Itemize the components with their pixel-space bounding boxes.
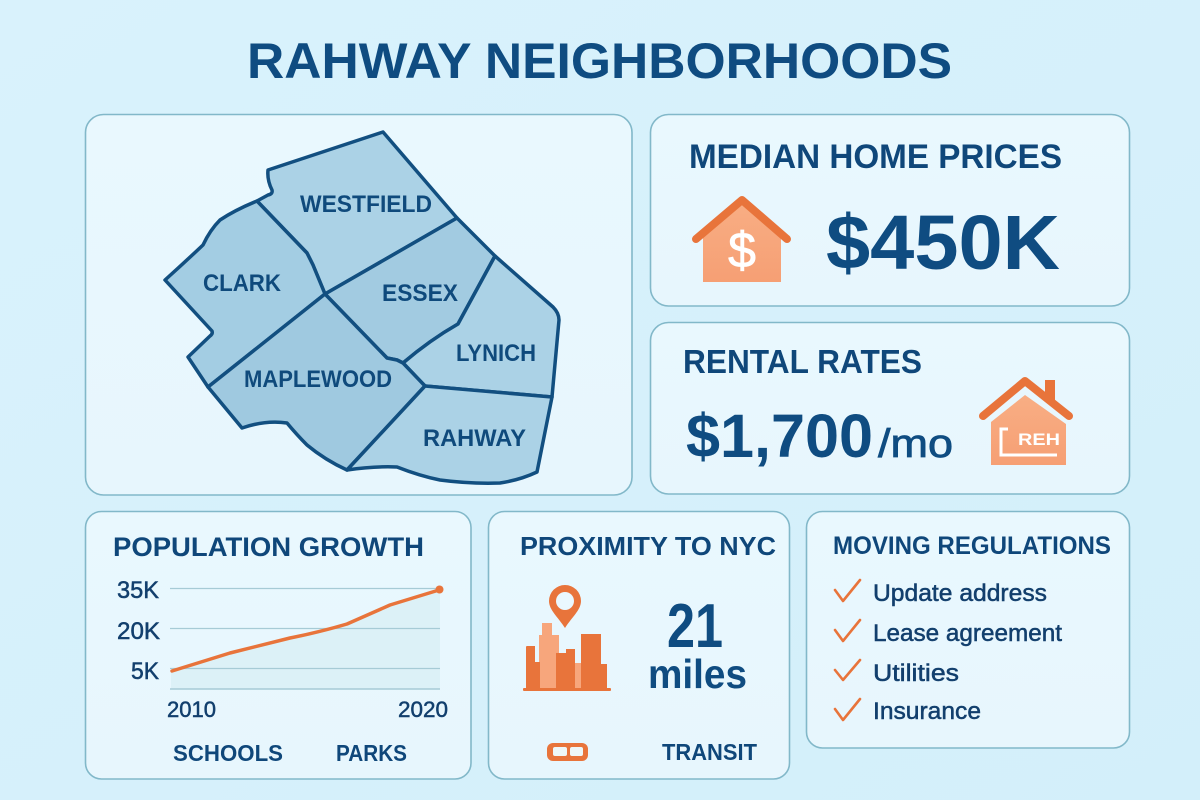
checklist: Insurance (873, 698, 981, 725)
checklist: Update address (873, 580, 1047, 607)
icon: house with dollar: $ (728, 222, 756, 278)
panel: population growth (86, 512, 471, 779)
map labels: RAHWAY (423, 425, 526, 452)
panel: rental rates (650, 322, 1130, 494)
icon: house with dollar (696, 200, 787, 282)
distance value (648, 592, 747, 697)
map labels: LYNICH (456, 340, 536, 367)
checklist: Lease agreement (873, 620, 1062, 647)
distance value: miles (648, 651, 747, 697)
line chart (170, 586, 444, 689)
axis labels: 5K (131, 658, 159, 685)
map labels: MAPLEWOOD (244, 366, 392, 393)
icon: rental house: REH (1018, 430, 1060, 449)
axis labels: 2010 (167, 697, 216, 722)
title: RAHWAY NEIGHBORHOODS (247, 33, 952, 89)
value (686, 402, 953, 470)
panel: proximity to NYC (488, 512, 790, 779)
map labels: CLARK (203, 270, 282, 297)
value: /mo (878, 422, 953, 466)
panel: moving regulations (806, 512, 1130, 748)
heading: RENTAL RATES (683, 343, 922, 380)
map labels: WESTFIELD (300, 191, 432, 218)
schools label: SCHOOLS (173, 740, 283, 766)
map regions (165, 132, 559, 483)
parks label: PARKS (336, 740, 407, 766)
icon: rental house (983, 380, 1069, 465)
value: $450K (826, 200, 1060, 286)
panel: median home prices (650, 114, 1130, 306)
heading: PROXIMITY TO NYC (520, 531, 776, 561)
icon: transit (547, 743, 588, 761)
map labels (203, 191, 536, 452)
axis labels: 35K (117, 577, 159, 604)
heading: MEDIAN HOME PRICES (689, 138, 1062, 176)
heading: MOVING REGULATIONS (833, 532, 1111, 560)
transit label: TRANSIT (662, 739, 757, 765)
checklist: Utilities (873, 660, 959, 687)
map labels: ESSEX (382, 280, 458, 307)
axis labels: 2020 (398, 697, 448, 722)
axis labels (117, 577, 448, 722)
axis labels: 20K (117, 618, 160, 645)
distance value: 21 (667, 592, 723, 661)
heading: POPULATION GROWTH (113, 532, 424, 562)
icon: city with pin (523, 585, 611, 691)
panel: neighborhood map (86, 114, 632, 495)
checklist (835, 580, 1062, 725)
value: $1,700 (686, 402, 873, 470)
